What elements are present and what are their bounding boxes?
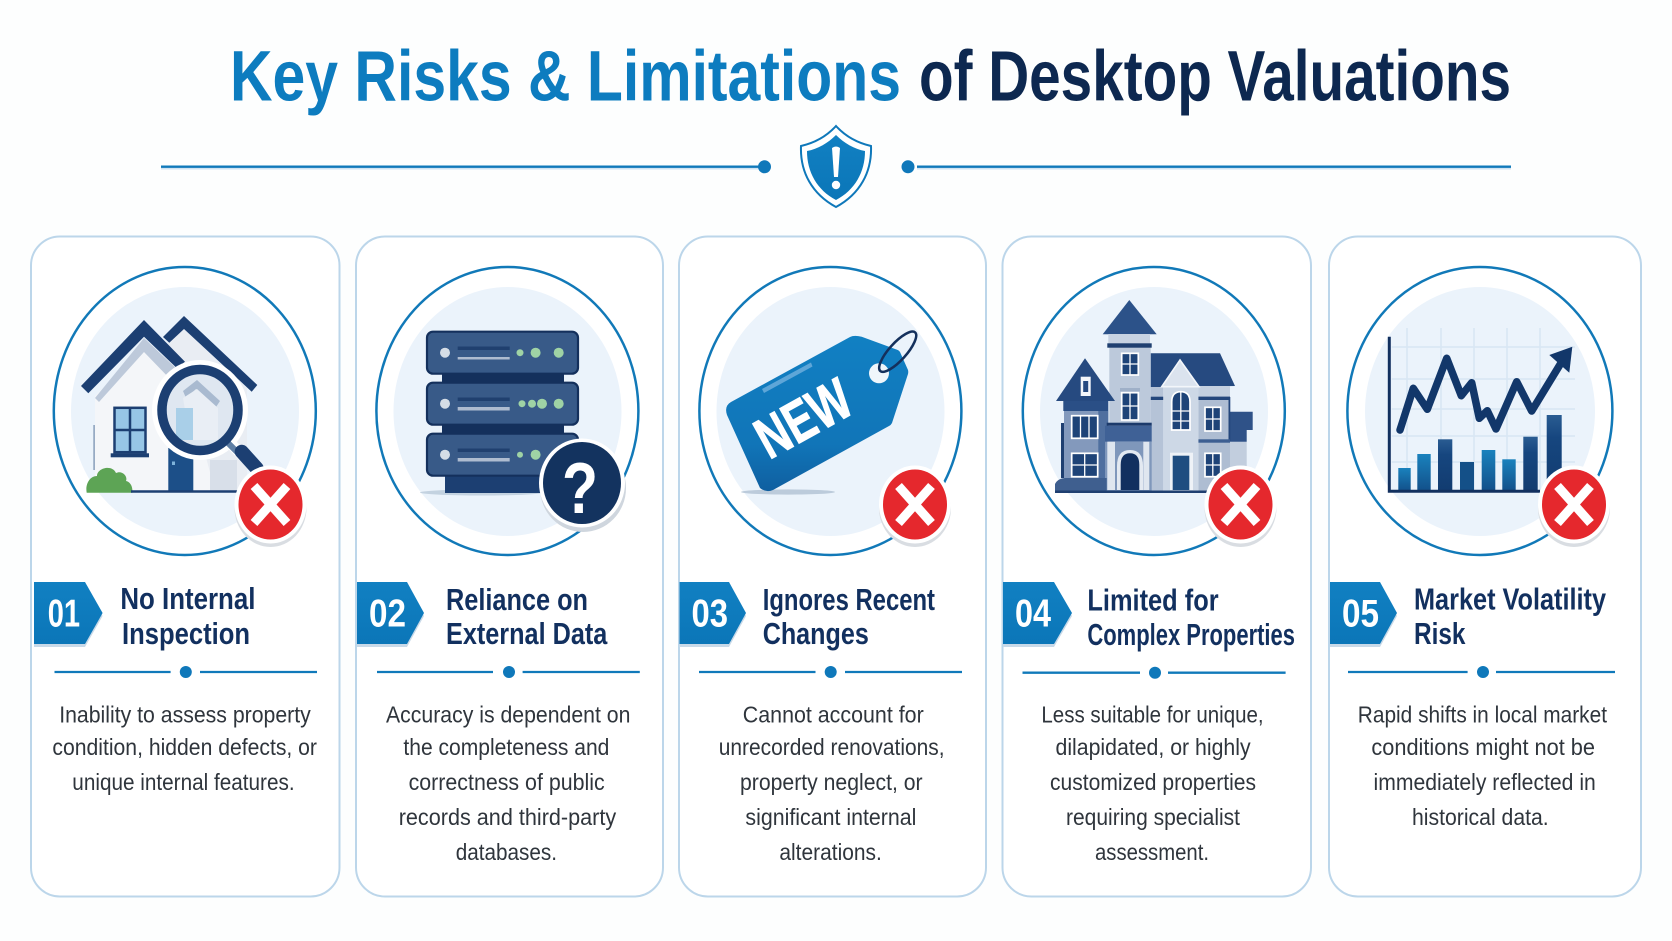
description <box>719 702 945 865</box>
description: records and third-party <box>399 804 617 830</box>
heading <box>1087 584 1295 652</box>
heading <box>446 583 608 651</box>
description: unique internal features. <box>72 769 295 795</box>
number tag 01: 01 <box>48 592 80 636</box>
icon: red cross badge <box>1538 466 1610 547</box>
number tag 01 <box>34 582 103 647</box>
heading: Changes <box>763 617 869 651</box>
number tag 02: 02 <box>369 592 406 636</box>
icon: volatile chart with red cross <box>1347 267 1612 555</box>
icon: red cross badge <box>879 466 951 547</box>
description: assessment. <box>1095 839 1209 865</box>
description: correctness of public <box>409 769 605 795</box>
icon: red cross badge <box>234 466 306 547</box>
description: immediately reflected in <box>1374 769 1596 795</box>
heading: External Data <box>446 617 608 651</box>
icon: house under magnifier with red cross <box>54 267 316 555</box>
heading: Limited for <box>1087 584 1219 618</box>
heading: No Internal <box>120 582 255 616</box>
description: condition, hidden defects, or <box>52 734 317 760</box>
divider <box>54 666 317 678</box>
description: unrecorded renovations, <box>719 734 945 760</box>
divider <box>1348 666 1615 678</box>
description: Rapid shifts in local market <box>1358 702 1608 728</box>
number tag 05 <box>1330 582 1397 647</box>
title: of Desktop Valuations <box>919 38 1511 116</box>
description: dilapidated, or highly <box>1056 734 1251 760</box>
number tag 02 <box>357 582 424 647</box>
description <box>52 702 317 795</box>
number tag 03 <box>680 582 746 647</box>
title divider right <box>902 160 1511 173</box>
heading: Ignores Recent <box>763 583 935 617</box>
heading: Risk <box>1414 617 1466 651</box>
panel: card 5 market volatility risk <box>1329 236 1641 896</box>
icon: server rack with question mark <box>376 267 638 555</box>
description <box>1358 702 1608 830</box>
number tag 03: 03 <box>692 592 728 636</box>
icon: new price tag with red cross <box>699 267 961 555</box>
panel: card 4 limited for complex properties <box>1002 236 1311 896</box>
divider <box>699 666 962 678</box>
heading <box>120 582 255 651</box>
icon: question badge: ? <box>562 449 598 529</box>
panel: card 1 no internal inspection <box>31 236 340 896</box>
title: Key Risks & Limitations <box>230 38 901 116</box>
description: Cannot account for <box>743 702 924 728</box>
heading: Reliance on <box>446 583 588 617</box>
description: Less suitable for unique, <box>1041 702 1264 728</box>
description: property neglect, or <box>740 769 923 795</box>
icon: mansion with red cross <box>1023 267 1285 555</box>
description: historical data. <box>1412 804 1549 830</box>
icon: new price tag with red cross: NEW <box>744 366 863 471</box>
icon: warning shield <box>801 126 871 207</box>
description: databases. <box>456 839 557 865</box>
divider <box>377 666 640 678</box>
heading <box>763 583 935 651</box>
heading <box>1414 582 1606 651</box>
description <box>386 702 630 865</box>
icon: red cross badge <box>1204 466 1276 547</box>
heading: Inspection <box>122 617 250 651</box>
description: significant internal <box>745 804 916 830</box>
heading: Market Volatility <box>1414 582 1606 616</box>
number tag 04 <box>1003 582 1072 647</box>
panel: card 3 ignores recent changes <box>679 236 986 896</box>
description: alterations. <box>779 839 882 865</box>
divider <box>1022 667 1286 679</box>
description: Accuracy is dependent on <box>386 702 630 728</box>
number tag 05: 05 <box>1342 592 1379 636</box>
title <box>230 38 1511 116</box>
description: conditions might not be <box>1371 734 1595 760</box>
description: Inability to assess property <box>59 702 311 728</box>
panel: card 2 reliance on external data <box>356 236 663 896</box>
description: requiring specialist <box>1066 804 1241 830</box>
description: customized properties <box>1050 769 1256 795</box>
description: the completeness and <box>403 734 609 760</box>
number tag 04: 04 <box>1015 592 1051 636</box>
heading: Complex Properties <box>1087 618 1295 652</box>
title divider left <box>161 160 771 173</box>
description <box>1041 702 1264 865</box>
icon: question badge <box>539 438 626 532</box>
